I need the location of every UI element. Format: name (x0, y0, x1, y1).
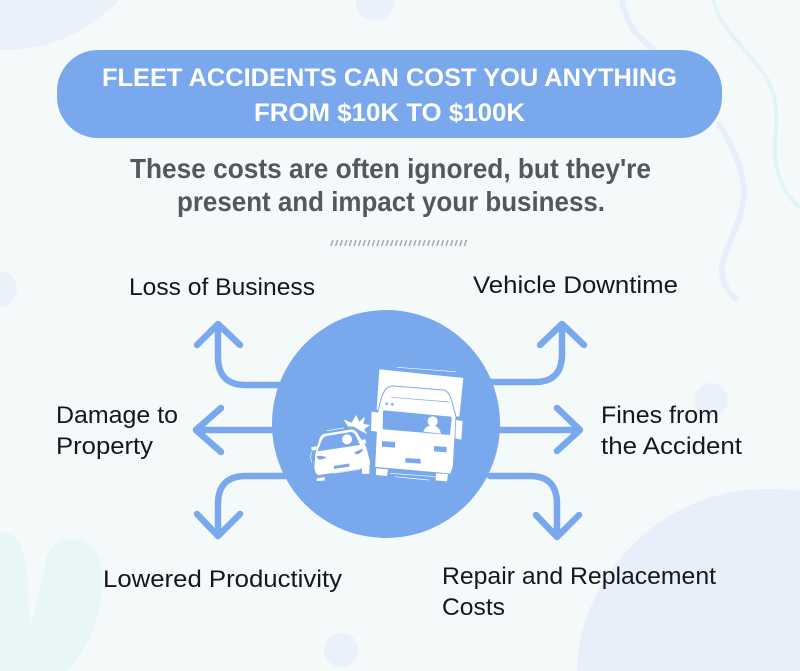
subtitle: These costs are often ignored, but they're (130, 153, 651, 184)
arrow: lowered productivity (197, 476, 285, 536)
label: repair and replacement costs: Costs (442, 594, 505, 621)
impact burst (343, 415, 370, 434)
arrows (196, 324, 584, 537)
label: fines from the accident (601, 402, 742, 460)
label: loss of business: Loss of Business (129, 274, 315, 301)
driver (428, 416, 438, 426)
label: fines from the accident: Fines from (601, 402, 719, 429)
label: repair and replacement costs: Repair and Replacement (442, 563, 716, 590)
subtitle (130, 153, 651, 217)
subtitle: present and impact your business. (177, 186, 605, 217)
windshield (383, 410, 452, 435)
car (314, 429, 370, 475)
arrow: loss of business (197, 324, 285, 385)
label: lowered productivity: Lowered Productivity (103, 566, 342, 593)
label: repair and replacement costs (442, 563, 716, 621)
arrow: fines (490, 408, 580, 451)
label: damage to property (56, 402, 178, 460)
icon: truck and car collision (311, 367, 463, 481)
central circle (272, 310, 500, 538)
label: fines from the accident: the Accident (601, 433, 742, 460)
title banner (57, 50, 722, 138)
hatched divider (331, 240, 466, 246)
truck cab (375, 386, 456, 474)
label: damage to property: Damage to (56, 402, 178, 429)
title banner: FLEET ACCIDENTS CAN COST YOU ANYTHING (102, 64, 677, 92)
arrow: repair (490, 476, 579, 537)
truck lights and grille (382, 441, 447, 464)
title banner: FROM $10K TO $100K (254, 99, 525, 127)
label: damage to property: Property (56, 433, 153, 460)
label: vehicle downtime: Vehicle Downtime (473, 272, 678, 299)
arrow: damage to property (196, 408, 285, 452)
truck cargo box (377, 369, 463, 417)
arrow: vehicle downtime (490, 324, 584, 382)
